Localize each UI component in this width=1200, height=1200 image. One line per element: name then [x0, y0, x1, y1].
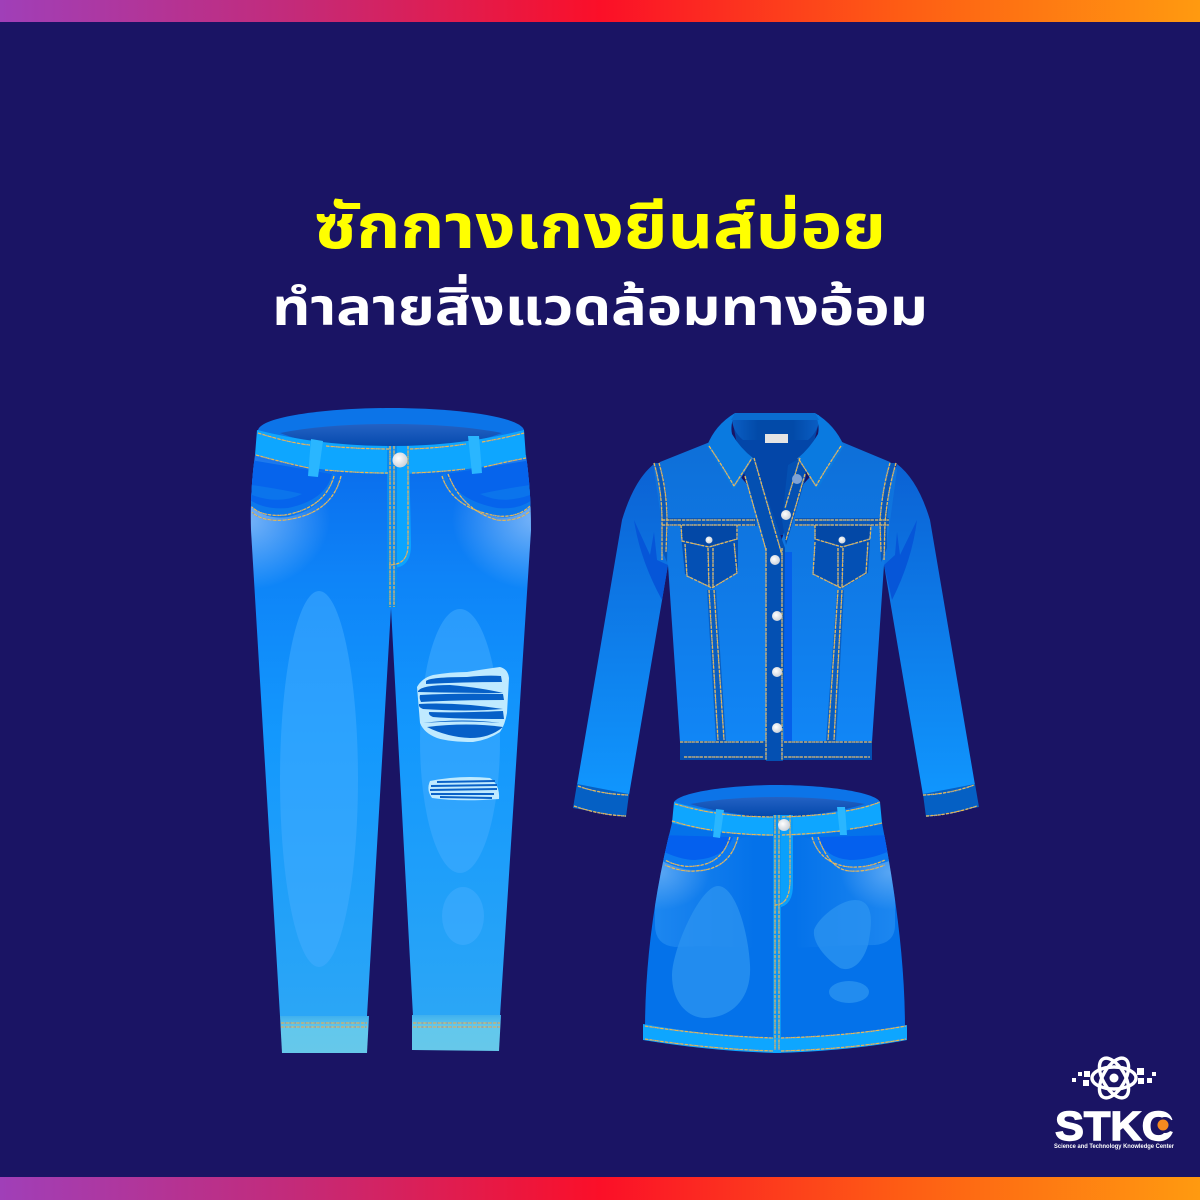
yoke seam [662, 518, 889, 526]
collar left [707, 413, 753, 490]
waistband [255, 430, 526, 474]
logo: STKC [1054, 1053, 1174, 1150]
illustration: ripped jeans [250, 408, 531, 1053]
top gradient bar [0, 0, 1200, 22]
collar top [731, 413, 819, 420]
cuffs [573, 784, 629, 817]
buttons [706, 474, 846, 733]
waistband [672, 802, 882, 836]
tagline: Science and Technology Knowledge Center [1054, 1143, 1174, 1150]
highlights and wear marks [160, 446, 622, 967]
bottom gradient bar [0, 1177, 1200, 1200]
fly [773, 815, 793, 908]
neck label [765, 434, 788, 443]
pocket flaps [681, 526, 871, 547]
fly [387, 446, 411, 568]
illustration: denim jacket [573, 413, 979, 817]
inner shadow of waist [690, 797, 865, 817]
stitching [645, 802, 906, 1051]
illustration: denim skirt [643, 785, 907, 1053]
orange dot [1158, 1120, 1168, 1130]
right placket shadow [784, 552, 792, 742]
rip large [417, 667, 509, 742]
title [272, 193, 928, 337]
rip small [428, 777, 499, 800]
back of collar [732, 415, 819, 440]
placket [745, 458, 785, 761]
hem band [680, 741, 872, 760]
jacket body [654, 442, 897, 742]
right pocket [813, 525, 871, 589]
collar right [798, 413, 844, 490]
sleeve folds [634, 520, 668, 600]
left sleeve [577, 464, 680, 795]
right sleeve [872, 464, 975, 795]
pants body [251, 455, 531, 1016]
seams [707, 590, 844, 741]
inner shadow of waist [280, 424, 502, 448]
wordmark: STKC [1055, 1103, 1173, 1149]
highlights and wear marks [655, 835, 896, 1018]
left pocket [680, 525, 738, 589]
button [392, 452, 408, 468]
heading: yellow headline: ซักกางเกงยีนส์บ่อย [314, 193, 886, 262]
heading: white subheadline: ทำลายสิ่งแวดล้อมทางอ้อม [272, 274, 928, 337]
skirt body [645, 823, 905, 1045]
belt loops [308, 439, 323, 477]
stitching [252, 433, 530, 1027]
waist opening [674, 785, 880, 815]
icon: atom [1092, 1053, 1136, 1103]
cuff right [412, 1015, 501, 1051]
hem [643, 1024, 907, 1053]
belt loops [713, 809, 724, 838]
neck interior [732, 418, 820, 535]
icon: pixel squares [1072, 1068, 1156, 1086]
button [778, 819, 790, 831]
orange dot backing [1157, 1117, 1173, 1133]
front seam [773, 815, 781, 1053]
side seams [654, 463, 896, 562]
waist opening [258, 408, 524, 445]
cuff left [280, 1016, 369, 1053]
stitching [574, 446, 977, 816]
